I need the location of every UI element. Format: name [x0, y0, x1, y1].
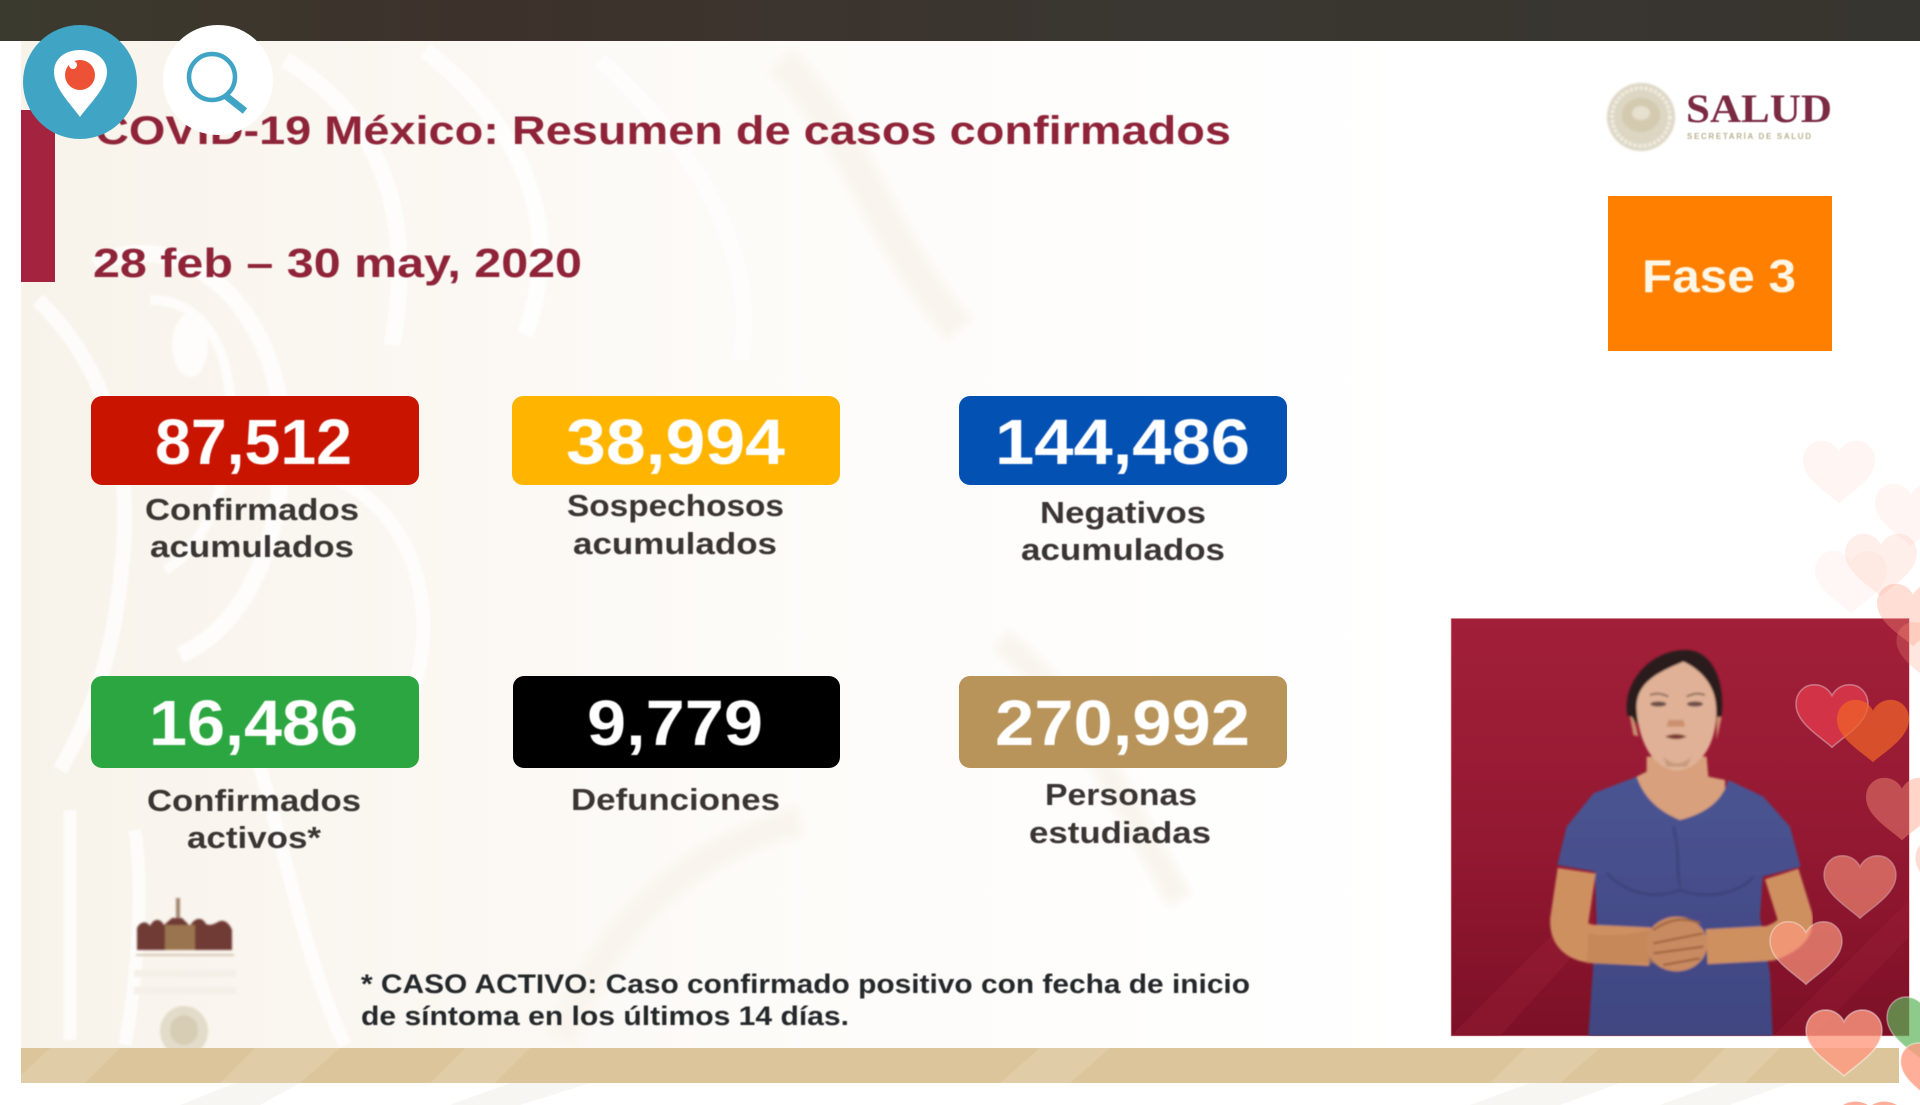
- stat: confirmados activos: [91, 676, 419, 855]
- left title accent bar: [21, 110, 55, 282]
- stat: confirmados activos: activos*: [187, 820, 322, 855]
- stat: personas estudiadas: 270,992: [995, 687, 1250, 759]
- logo: Salud: SALUD: [1686, 86, 1832, 131]
- stat: sospechosos acumulados: Sospechosos: [567, 488, 784, 523]
- logo: Salud: [1607, 83, 1832, 151]
- logo: Salud: SECRETARÍA DE SALUD: [1687, 132, 1811, 141]
- stat: personas estudiadas: estudiadas: [1029, 815, 1211, 850]
- stat: negativos acumulados: 144,486: [995, 406, 1250, 478]
- stat: negativos acumulados: acumulados: [1021, 532, 1225, 567]
- stat: defunciones: [513, 676, 840, 817]
- stat: defunciones: Defunciones: [571, 782, 780, 817]
- logo: independence figures and seal: [134, 898, 236, 1056]
- panel: sign language interpreter video: [1451, 618, 1909, 1036]
- icon: search magnifier: [163, 25, 273, 135]
- footnote: * CASO ACTIVO: Caso confirmado positivo con fecha de inicio: [361, 969, 1250, 999]
- stat: confirmados acumulados: [91, 396, 419, 564]
- hearts floating up the right edge: [1770, 441, 1920, 1105]
- stat: confirmados acumulados: Confirmados: [145, 492, 359, 527]
- footnote: [361, 969, 1250, 1031]
- stat: confirmados activos: Confirmados: [147, 783, 361, 818]
- icon: periscope pin: [23, 25, 137, 139]
- stat: confirmados acumulados: acumulados: [150, 529, 354, 564]
- stat: defunciones: 9,779: [587, 687, 763, 759]
- stat: sospechosos acumulados: [512, 396, 840, 561]
- stat: negativos acumulados: Negativos: [1040, 495, 1206, 530]
- stat: sospechosos acumulados: acumulados: [573, 526, 777, 561]
- stat: personas estudiadas: Personas: [1045, 777, 1197, 812]
- stat: negativos acumulados: [959, 396, 1287, 567]
- footnote: de síntoma en los últimos 14 días.: [361, 1001, 849, 1031]
- stat: personas estudiadas: [959, 676, 1287, 850]
- bottom tan band: [21, 1048, 1899, 1083]
- phase badge: [1608, 196, 1832, 351]
- stat: confirmados acumulados: 87,512: [155, 406, 352, 478]
- video background: [1451, 618, 1909, 1036]
- title: COVID-19 México: Resumen de casos confirmados: [95, 109, 1231, 153]
- interpreter figure: [1451, 650, 1909, 1036]
- date range: 28 feb – 30 may, 2020: [93, 240, 582, 286]
- top dark bar: [0, 0, 1920, 41]
- stat: confirmados activos: 16,486: [149, 687, 358, 759]
- phase badge: Fase 3: [1642, 250, 1796, 302]
- stat: sospechosos acumulados: 38,994: [566, 406, 785, 478]
